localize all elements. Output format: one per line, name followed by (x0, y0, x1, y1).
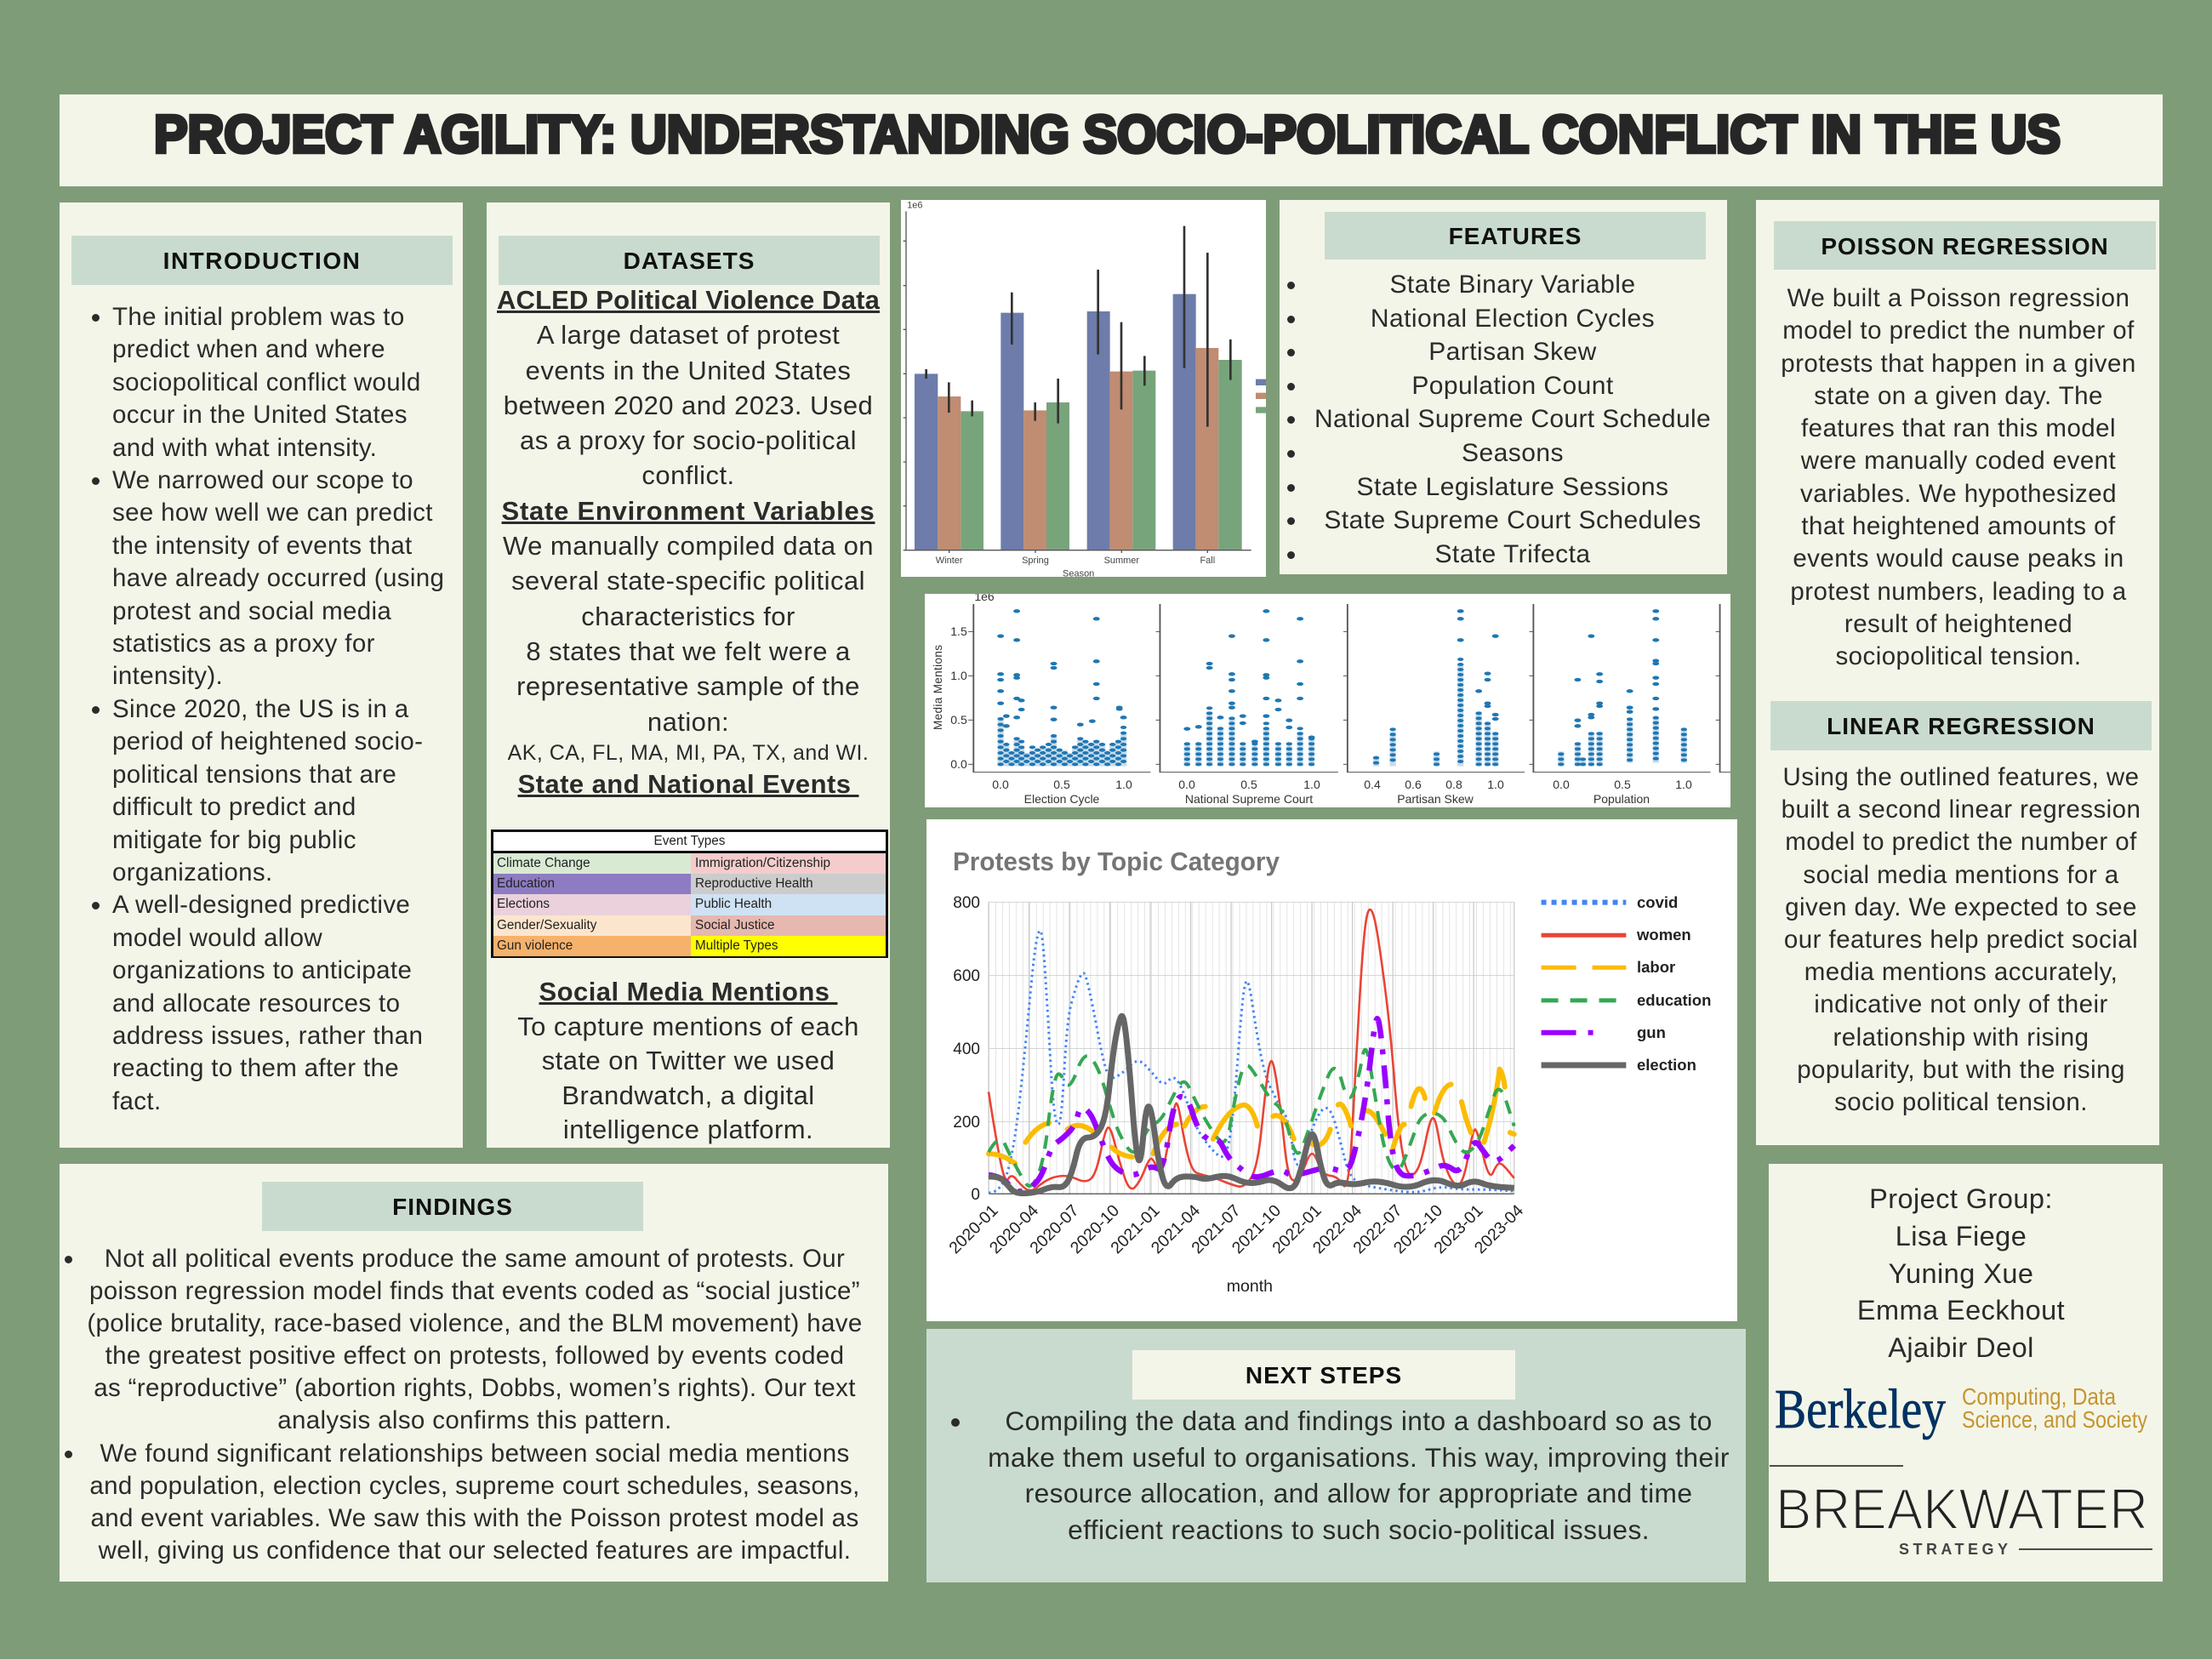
axis labels: 1.0 (1303, 778, 1320, 791)
axis labels: 1e6 (907, 200, 922, 210)
text: linear regression: indicative not only of their (1814, 990, 2108, 1018)
axis labels: 0.4 (1364, 778, 1381, 791)
text: project group names (1857, 1183, 2065, 1363)
legend labels: labor (1637, 958, 1675, 976)
logo: Breakwater Strategy (1770, 1466, 2152, 1558)
heading: features: FEATURES (1449, 223, 1582, 249)
bullet list: introduction: address issues, rather than (112, 1022, 423, 1050)
bullet list: introduction: intensity). (112, 662, 223, 690)
bullet list: introduction: predict when and where (112, 335, 385, 363)
bullet list: introduction: organizations. (112, 858, 273, 887)
legend labels: election (1637, 1056, 1696, 1074)
text: poisson regression: features that ran this model (1801, 414, 2116, 442)
bullet list: findings: analysis also confirms this pattern. (277, 1406, 672, 1434)
bullet list: features: State Binary Variable (1389, 271, 1636, 299)
logo: Berkeley: Berkeley (1775, 1378, 1946, 1440)
bullet list: introduction: reacting to them after the (112, 1054, 399, 1082)
plot lines (989, 902, 1626, 1194)
table rows: Multiple Types (695, 938, 778, 953)
axis labels: Election Cycle (1024, 792, 1100, 806)
logo: Berkeley (1775, 1378, 2147, 1440)
axis labels: National Supreme Court (1185, 792, 1313, 806)
bullet list: findings: and event variables. We saw this with the Poisson protest model as (90, 1504, 859, 1532)
heading: poisson regression (1774, 221, 2156, 270)
heading: poisson regression: POISSON REGRESSION (1821, 233, 2109, 259)
bullet list: next steps: resource allocation, and allow for appropriate and time (1025, 1478, 1692, 1508)
heading: introduction: INTRODUCTION (163, 248, 361, 274)
bullet list: next steps (951, 1405, 1730, 1545)
y axis labels (953, 894, 980, 1204)
subheading: state and national events: State and National Events (517, 769, 851, 799)
axis labels: 0.0 (992, 778, 1009, 791)
title: PROJECT AGILITY: UNDERSTANDING SOCIO-POLITICAL CONFLICT IN THE US (154, 105, 2061, 164)
x axis labels: 2022-10 (1390, 1201, 1446, 1257)
bullet list: findings: well, giving us confidence that our selected features are impactful. (99, 1536, 851, 1565)
bullet list: introduction: political tensions that are (112, 761, 396, 789)
text: project group names: Yuning Xue (1889, 1258, 2033, 1289)
text: social media mentions: To capture mentions of each (517, 1012, 859, 1041)
axis labels: 0.5 (1614, 778, 1631, 791)
axes (968, 604, 1736, 772)
text: linear regression: our features help predict social (1784, 926, 2138, 954)
panel: next steps (926, 1329, 1746, 1582)
bullet list: findings: poisson regression model finds that events coded as “social justice” (89, 1277, 860, 1305)
axis labels: 1.0 (1487, 778, 1504, 791)
data points (1001, 611, 1684, 764)
text: social media mentions: intelligence platform. (563, 1115, 813, 1144)
text: linear regression: media mentions accurately, (1804, 958, 2118, 986)
text: linear regression: Using the outlined features, we (1783, 763, 2139, 791)
text: linear regression (1782, 763, 2141, 1116)
text: ACLED and state environment descriptions (497, 285, 880, 737)
table rows: Education (497, 876, 555, 891)
text: poisson regression (1781, 284, 2136, 670)
axis labels: 1.0 (1115, 778, 1132, 791)
bullet list: features: State Legislature Sessions (1357, 473, 1668, 501)
chart title: Protests by Topic Category (953, 847, 1280, 876)
x axis labels: 2022-04 (1309, 1201, 1365, 1257)
heading: findings: FINDINGS (392, 1194, 513, 1220)
bullet list: features: Seasons (1462, 439, 1564, 467)
panel: datasets (487, 202, 890, 1148)
bullet list: introduction: organizations to anticipate (112, 956, 412, 984)
bullet list: next steps: make them useful to organisations. This way, improving their (988, 1442, 1730, 1473)
bullet list: findings: as “reproductive” (abortion rights, Dobbs, women’s rights). Our text (94, 1374, 856, 1402)
x axis labels: 2022-01 (1268, 1201, 1325, 1257)
text: ACLED and state environment descriptions: ACLED Political Violence Data (497, 285, 880, 315)
axis labels: 0.0 (1553, 778, 1570, 791)
text: poisson regression: events would cause peaks in (1793, 544, 2124, 573)
panel: features (1280, 200, 1727, 574)
table rows: Reproductive Health (695, 876, 813, 891)
bullet list: features: State Supreme Court Schedules (1324, 506, 1702, 534)
text: ACLED and state environment descriptions: We manually compiled data on (503, 531, 874, 561)
table rows: Social Justice (695, 918, 775, 932)
heading: datasets: DATASETS (624, 248, 755, 274)
text: poisson regression: protests that happen in a given (1781, 350, 2136, 378)
text: ACLED and state environment descriptions: conflict. (641, 460, 735, 490)
axis labels: 0.5 (950, 713, 967, 727)
axis labels: Partisan Skew (1397, 792, 1474, 806)
text: poisson regression: protest numbers, leading to a (1790, 578, 2127, 606)
panel: introduction (60, 202, 463, 1148)
axis labels: 0.5 (1053, 778, 1070, 791)
bullet list: introduction: and with what intensity. (112, 434, 377, 462)
y axis labels: 400 (953, 1040, 980, 1058)
chart: media mentions scatter plots (925, 594, 1730, 807)
text: ACLED and state environment descriptions: representative sample of the (516, 671, 860, 701)
axis labels: 0.5 (1240, 778, 1257, 791)
panel: poisson and linear regression (1756, 200, 2159, 1145)
legend labels: education (1637, 991, 1711, 1009)
bullet list: next steps: efficient reactions to such socio-political issues. (1068, 1514, 1650, 1545)
x axis labels: 2021-04 (1148, 1201, 1204, 1257)
bullet list: introduction (92, 303, 444, 1115)
bullet list: findings: and population, election cycles, supreme court schedules, seasons, (89, 1472, 860, 1500)
chart: protests by topic category (926, 819, 1737, 1321)
text: state list: AK, CA, FL, MA, MI, PA, TX, and WI. (508, 741, 869, 765)
text: linear regression: socio political tension. (1834, 1088, 2088, 1116)
chart: seasonal bar chart (901, 200, 1266, 577)
legend labels (1636, 893, 1711, 1074)
axis labels: 0.0 (1178, 778, 1195, 791)
logo: Berkeley: Computing, Data (1962, 1383, 2116, 1410)
heading: linear regression (1770, 701, 2152, 750)
bullet list: introduction: protest and social media (112, 597, 391, 625)
legend swatches (1542, 903, 1626, 1065)
bullet list: features: National Supreme Court Schedule (1314, 405, 1711, 433)
text: linear regression: model to predict the number of (1785, 828, 2137, 856)
x axis labels: month (1227, 1277, 1273, 1296)
text: project group names: Project Group: (1869, 1183, 2053, 1214)
text: project group names: Emma Eeckhout (1857, 1295, 2065, 1325)
heading: linear regression: LINEAR REGRESSION (1827, 713, 2095, 739)
axis labels: Summer (1104, 556, 1139, 566)
table: event types (491, 830, 888, 958)
logo: Breakwater Strategy: STRATEGY (1899, 1541, 2008, 1558)
x axis labels: 2020-01 (945, 1201, 1002, 1257)
axis labels (907, 200, 1215, 579)
text: social media mentions: Social Media Mentions (539, 977, 830, 1006)
text: ACLED and state environment descriptions: State Environment Variables (502, 496, 875, 526)
bullet list: features: State Trifecta (1434, 540, 1591, 568)
logo: Breakwater Strategy: BREAKWATER (1776, 1477, 2148, 1542)
table header: Event Types (654, 834, 725, 848)
y axis labels: 0 (971, 1186, 980, 1204)
heading: findings (262, 1182, 643, 1231)
x axis labels: 2023-01 (1430, 1201, 1487, 1257)
x axis labels (945, 1201, 1527, 1296)
x axis labels: 2021-07 (1188, 1201, 1245, 1257)
axis labels: 1.5 (950, 624, 967, 638)
axis labels: Spring (1022, 556, 1049, 566)
x axis labels: 2020-04 (986, 1201, 1042, 1257)
bullet list: introduction: period of heightened socio- (112, 727, 423, 755)
bullet list: introduction: and allocate resources to (112, 989, 400, 1018)
legend labels: gun (1637, 1023, 1666, 1041)
axis labels: 0.6 (1405, 778, 1422, 791)
text: ACLED and state environment descriptions: between 2020 and 2023. Used (504, 391, 873, 420)
bullet list: findings: We found significant relationships between social media mentions (100, 1440, 850, 1468)
text: poisson regression: model to predict the number of (1782, 316, 2135, 345)
light halo of dense points (1001, 664, 1684, 767)
x axis labels: 2021-01 (1107, 1201, 1164, 1257)
bullet list: features: Population Count (1411, 372, 1614, 400)
text: poisson regression: state on a given day. The (1814, 382, 2103, 410)
text: poisson regression: were manually coded event (1801, 447, 2116, 475)
bullet list: introduction: occur in the United States (112, 401, 408, 429)
legend labels: women (1636, 926, 1691, 944)
bullet list: introduction: the intensity of events that (112, 532, 413, 560)
text: ACLED and state environment descriptions: events in the United States (526, 356, 851, 385)
axis labels: Fall (1200, 556, 1215, 566)
table rows: Gender/Sexuality (497, 918, 596, 932)
text: ACLED and state environment descriptions: A large dataset of protest (537, 320, 840, 350)
x axis labels: 2020-07 (1026, 1201, 1083, 1257)
bullet list: findings: (police brutality, race-based violence, and the BLM movement) have (87, 1309, 863, 1337)
y axis labels: 200 (953, 1114, 980, 1132)
text: poisson regression: result of heightened (1844, 610, 2072, 638)
text: social media mentions (517, 977, 859, 1144)
axis labels: 0.8 (1445, 778, 1462, 791)
heading: features (1325, 212, 1706, 259)
heading: next steps (1132, 1350, 1515, 1400)
axis labels: 0.0 (950, 757, 967, 771)
bullet list: introduction: The initial problem was to (112, 303, 405, 331)
bullet list: introduction: sociopolitical conflict would (112, 368, 421, 396)
text: linear regression: built a second linear regression (1782, 795, 2141, 824)
text: project group names: Ajaibir Deol (1888, 1332, 2034, 1363)
bullet list: introduction: see how well we can predict (112, 499, 433, 527)
bullet list: introduction: fact. (112, 1087, 162, 1115)
logos (1770, 1378, 2152, 1558)
axis labels: 1.0 (950, 669, 967, 682)
text: social media mentions: Brandwatch, a digital (562, 1080, 815, 1110)
bullet list: introduction: difficult to predict and (112, 793, 356, 821)
bullet list: introduction: mitigate for big public (112, 825, 356, 854)
axis labels: Population (1593, 792, 1650, 806)
text: linear regression: given day. We expected to see (1785, 893, 2137, 921)
bullet list: introduction: A well-designed predictive (112, 891, 410, 919)
panel: findings (60, 1164, 888, 1582)
text: poisson regression: We built a Poisson regression (1787, 284, 2129, 312)
bullet list: features: National Election Cycles (1371, 305, 1655, 333)
x axis labels: 2023-04 (1471, 1201, 1527, 1257)
bullet list: introduction: We narrowed our scope to (112, 466, 413, 494)
bullet list: introduction: model would allow (112, 924, 322, 952)
heading: datasets (499, 236, 880, 285)
bullet list: findings (65, 1245, 863, 1565)
text: poisson regression: variables. We hypothesized (1800, 480, 2117, 508)
x axis labels: 2022-07 (1349, 1201, 1406, 1257)
text: social media mentions: state on Twitter we used (542, 1046, 835, 1075)
axes (904, 211, 1251, 553)
text: ACLED and state environment descriptions: as a proxy for socio-political (520, 425, 857, 455)
legend labels: covid (1637, 893, 1678, 911)
panel: project group (1769, 1164, 2163, 1582)
table rows: Immigration/Citizenship (695, 856, 830, 870)
y axis labels: 800 (953, 894, 980, 912)
text: ACLED and state environment descriptions: characteristics for (581, 601, 795, 631)
heading: introduction (71, 236, 453, 285)
heading: next steps: NEXT STEPS (1246, 1362, 1402, 1388)
table rows (493, 853, 886, 956)
table rows: Public Health (695, 897, 772, 911)
axis labels: Media Mentions (932, 645, 944, 730)
text: linear regression: relationship with rising (1833, 1023, 2089, 1052)
x axis labels: 2021-10 (1229, 1201, 1285, 1257)
text: poisson regression: sociopolitical tension. (1835, 642, 2082, 670)
error bars (926, 226, 1230, 427)
table rows: Climate Change (497, 856, 590, 870)
text: poisson regression: that heightened amounts of (1801, 512, 2116, 540)
y axis labels: 600 (953, 967, 980, 985)
bullet list: features (1287, 271, 1711, 568)
text: linear regression: popularity, but with the rising (1797, 1056, 2125, 1084)
bullet list: introduction: have already occurred (using (112, 564, 444, 592)
bars (915, 294, 1266, 550)
text: linear regression: social media mentions for a (1803, 861, 2119, 889)
table rows: Gun violence (497, 938, 573, 953)
bullet list: findings: Not all political events produce the same amount of protests. Our (105, 1245, 845, 1273)
axis labels: 1.0 (1675, 778, 1692, 791)
text: ACLED and state environment descriptions: nation: (647, 707, 729, 737)
bullet list: findings: the greatest positive effect on protests, followed by events coded (105, 1342, 844, 1370)
text: ACLED and state environment descriptions: 8 states that we felt were a (526, 636, 851, 666)
table rows: Elections (497, 897, 550, 911)
text: ACLED and state environment descriptions: several state-specific political (511, 566, 865, 596)
bullet list: introduction: Since 2020, the US is in a (112, 695, 409, 723)
bullet list: introduction: statistics as a proxy for (112, 630, 375, 658)
title banner (60, 94, 2163, 186)
text: project group names: Lisa Fiege (1896, 1221, 2027, 1251)
table header (493, 832, 886, 853)
x axis labels: 2020-10 (1067, 1201, 1123, 1257)
bullet list: features: Partisan Skew (1428, 338, 1597, 366)
axis labels: Winter (936, 556, 963, 566)
axis labels (932, 590, 1692, 806)
bullet list: next steps: Compiling the data and findings into a dashboard so as to (1005, 1405, 1713, 1436)
